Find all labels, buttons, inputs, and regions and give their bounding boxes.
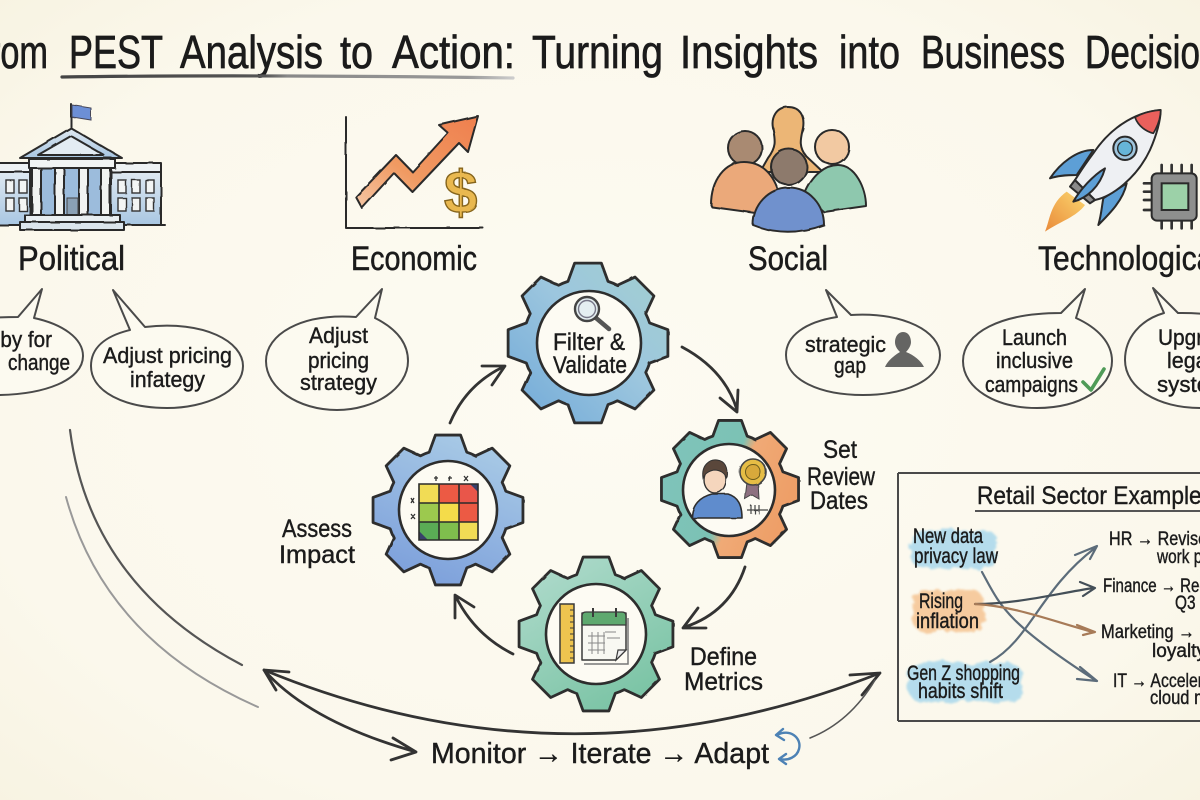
arrow: define to assess bbox=[455, 595, 513, 654]
bubble: launch inclusive campaigns: Launch bbox=[1002, 325, 1067, 350]
decorative: thin return stroke bbox=[810, 680, 875, 738]
title: Analysis bbox=[180, 26, 323, 78]
label: set review dates: Set bbox=[823, 436, 857, 464]
title: Action: bbox=[392, 26, 515, 78]
title: Insights bbox=[680, 26, 818, 78]
arrow: set to define bbox=[683, 567, 745, 628]
text: IT action bbox=[1113, 671, 1200, 709]
bubble: adjust pricing infategy bbox=[91, 290, 243, 408]
title: Business bbox=[921, 26, 1065, 78]
arrow: left arc into monitor bbox=[264, 670, 416, 760]
icon: government building bbox=[0, 104, 165, 230]
label: Social: Social bbox=[748, 240, 828, 278]
tag: rising inflation bbox=[912, 590, 985, 633]
arrow: privacy law to IT bbox=[982, 572, 1097, 681]
bubble: adjust pricing strategy bbox=[266, 289, 408, 410]
label: set review dates bbox=[807, 436, 876, 515]
panel: retail sector example bbox=[898, 473, 1200, 721]
tag: rising inflation: inflation bbox=[916, 610, 979, 633]
title bbox=[0, 26, 1200, 78]
arrow: inflation to marketing bbox=[975, 604, 1095, 635]
text: monitor iterate adapt: Monitor → Iterate → Adapt bbox=[431, 738, 769, 770]
chart: risk heat map bbox=[411, 476, 478, 540]
title: Turning bbox=[532, 26, 663, 78]
tag: rising inflation: Rising bbox=[919, 590, 963, 613]
label: set review dates: Dates bbox=[810, 487, 868, 515]
bubble: lobby for policy change: change bbox=[8, 350, 70, 375]
title: into bbox=[839, 26, 900, 78]
bubble: adjust pricing strategy: Adjust bbox=[309, 323, 368, 348]
bubble: launch inclusive campaigns: inclusive bbox=[996, 348, 1073, 373]
bubble: adjust pricing strategy: pricing bbox=[308, 348, 369, 373]
label: assess impact bbox=[279, 515, 355, 569]
bubble: strategic gap bbox=[786, 290, 940, 395]
bubble: adjust pricing infategy: infategy bbox=[130, 367, 205, 392]
bubble: lobby for policy change bbox=[0, 289, 83, 395]
arrow: inflation to finance bbox=[975, 582, 1095, 604]
gear: filter and validate: Validate bbox=[553, 352, 627, 379]
bubble: upgrade legacy systems bbox=[1125, 288, 1200, 408]
tag: gen z shopping habits shift: Gen Z shopping bbox=[907, 662, 1020, 685]
label: set review dates: Review bbox=[807, 463, 876, 491]
bubble: adjust pricing infategy: Adjust pricing bbox=[103, 343, 232, 368]
tag: new data privacy law bbox=[911, 525, 999, 568]
text: marketing action bbox=[1101, 622, 1200, 662]
tag: gen z shopping habits shift bbox=[907, 662, 1022, 703]
arrow: filter to set bbox=[682, 347, 738, 412]
icon: green check bbox=[1083, 369, 1104, 390]
icon: rocket and chip bbox=[1045, 110, 1197, 232]
label: assess impact: Assess bbox=[282, 515, 352, 543]
icon: person silhouette bbox=[885, 332, 924, 367]
gear: filter and validate bbox=[508, 263, 668, 423]
icon: group of people bbox=[711, 107, 866, 232]
bubble: strategic gap: gap bbox=[834, 353, 866, 378]
arrow: assess to filter bbox=[450, 366, 505, 423]
tag: gen z shopping habits shift: habits shift bbox=[918, 680, 1003, 703]
icon: calendar bbox=[582, 608, 628, 664]
label: define metrics: Define bbox=[690, 643, 757, 671]
gear: set review dates bbox=[661, 420, 799, 558]
icon: refresh loop bbox=[776, 729, 799, 764]
title: PEST bbox=[69, 26, 163, 78]
icon: magnifier bbox=[575, 297, 609, 329]
arrow: long sweeping double-headed arc bbox=[264, 670, 880, 734]
bubble: strategic gap: strategic bbox=[805, 332, 886, 357]
icon: growth chart with dollar: $ bbox=[444, 159, 477, 226]
tag: new data privacy law: New data bbox=[913, 525, 983, 548]
gear: define metrics bbox=[519, 557, 673, 711]
text: HR action bbox=[1109, 529, 1200, 568]
label: define metrics: Metrics bbox=[684, 668, 763, 696]
label: Economic: Economic bbox=[351, 240, 477, 278]
tag: new data privacy law: privacy law bbox=[914, 545, 999, 568]
title: to bbox=[340, 26, 373, 78]
gear: assess impact bbox=[373, 435, 523, 585]
arc: left feedback stroke dark bbox=[70, 430, 242, 665]
text: finance action bbox=[1103, 576, 1200, 614]
icon: ruler bbox=[560, 604, 574, 663]
label: Political: Political bbox=[18, 240, 125, 278]
arrow: gen z to HR bbox=[990, 546, 1097, 662]
bubble: launch inclusive campaigns bbox=[963, 289, 1112, 408]
gear: filter and validate: Filter & bbox=[553, 329, 625, 356]
icon: growth chart with dollar bbox=[346, 116, 483, 228]
bubble: adjust pricing strategy: strategy bbox=[300, 370, 377, 395]
icon: person with badge bbox=[692, 459, 768, 518]
label: assess impact: Impact bbox=[279, 541, 355, 569]
label: define metrics bbox=[684, 643, 763, 696]
arc: left feedback stroke light bbox=[66, 497, 258, 707]
bubble: launch inclusive campaigns: campaigns bbox=[985, 372, 1078, 397]
